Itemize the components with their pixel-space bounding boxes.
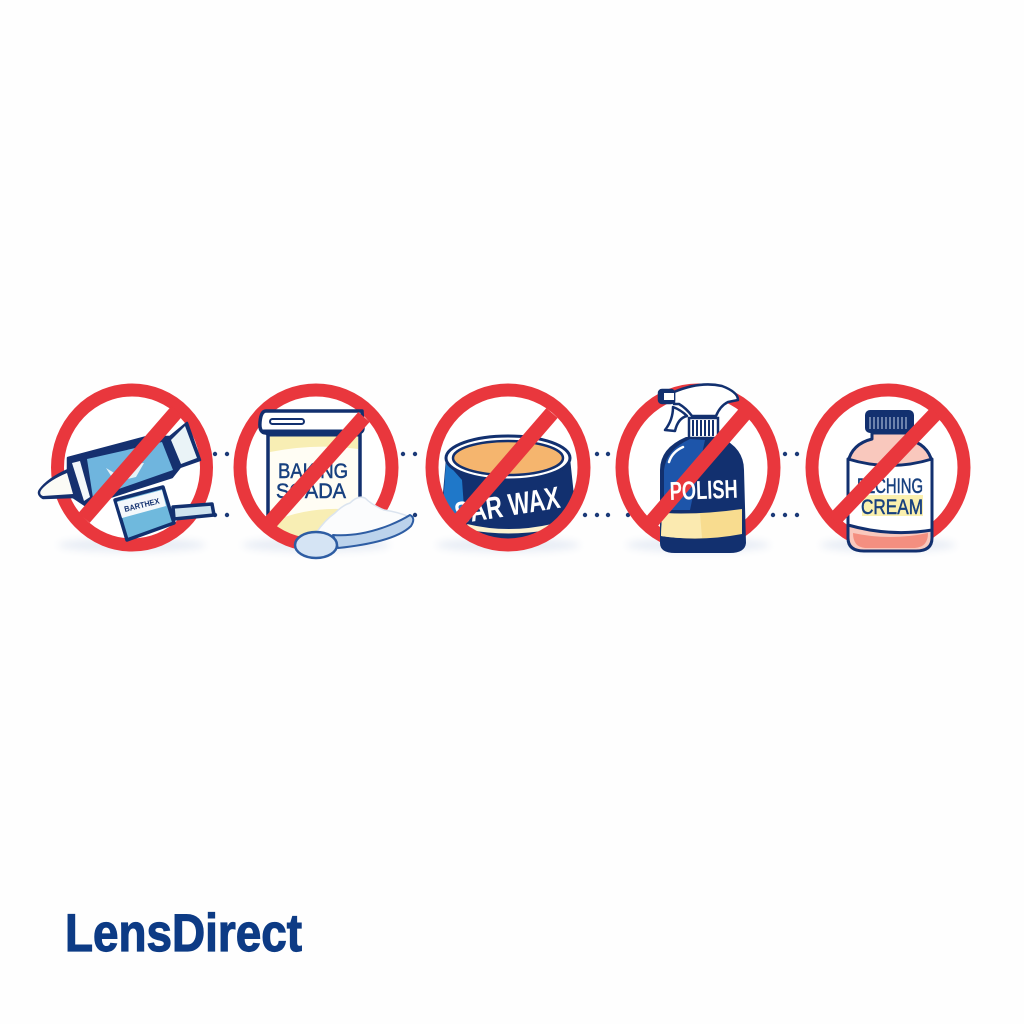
package text: SOADA [276,480,346,503]
prohibition slash [268,417,364,525]
red ring [240,390,392,545]
bag top roll [260,411,363,436]
prohibition slash [84,411,177,518]
cream jar [848,410,932,551]
spray bottle [660,418,746,553]
icon: prohibited car wax [432,390,584,552]
small box with applicator: BARTHEX [123,496,161,514]
wax tin [442,436,575,540]
icon: prohibited baking soda [240,390,413,558]
icon: prohibited bleaching cream [812,390,964,552]
toothpaste tube [39,423,200,505]
logo: LensDirect: LensDirect [65,904,302,963]
jar label first line: BLCHING [857,475,923,498]
prohibition slash [456,413,552,524]
spoon with powder [295,497,413,558]
red ring [432,390,584,545]
small box with applicator [115,487,214,540]
jar label second line: CREAM [861,496,923,519]
icon: prohibited toothpaste [39,390,214,552]
prohibition slash [648,412,746,526]
tin label text: SAR WAX [452,480,563,531]
package text [276,460,348,503]
package text: BAKING [278,460,348,483]
icon: prohibited polish spray [622,384,774,553]
spray trigger head [659,384,738,431]
prohibition slash [834,413,936,520]
baking soda bag [268,432,360,540]
bottle label text: POLISH [669,474,738,506]
dotted connector rows [58,452,799,517]
